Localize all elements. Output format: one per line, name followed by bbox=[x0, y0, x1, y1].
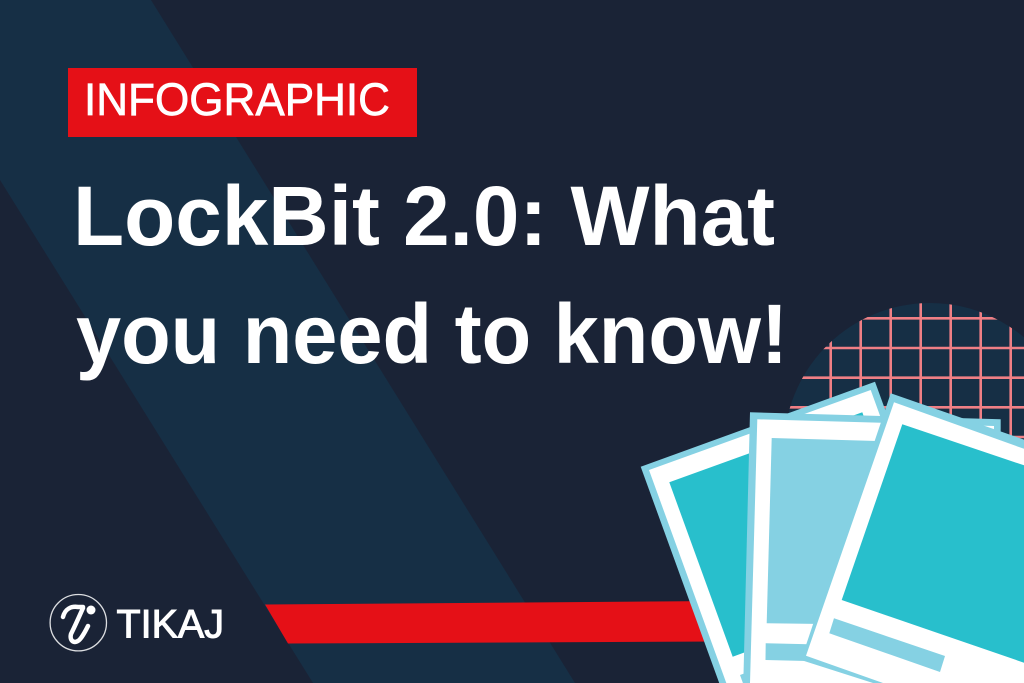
photo card: left bbox=[641, 382, 984, 683]
tag: infographic bbox=[68, 68, 417, 137]
title: you need to know! bbox=[76, 287, 788, 381]
title bbox=[73, 169, 788, 381]
grid circle bbox=[788, 303, 1024, 440]
logo: Tikaj: TIKAJ bbox=[116, 602, 224, 646]
diagonal background band bbox=[0, 0, 575, 683]
photo card: right bbox=[801, 393, 1024, 683]
tag: infographic: INFOGRAPHIC bbox=[84, 74, 390, 125]
title: LockBit 2.0: What bbox=[73, 169, 775, 263]
logo: Tikaj bbox=[50, 594, 224, 651]
red bar bbox=[265, 601, 720, 644]
icon: logo mark bbox=[50, 594, 106, 651]
photo card: middle bbox=[743, 412, 1001, 683]
